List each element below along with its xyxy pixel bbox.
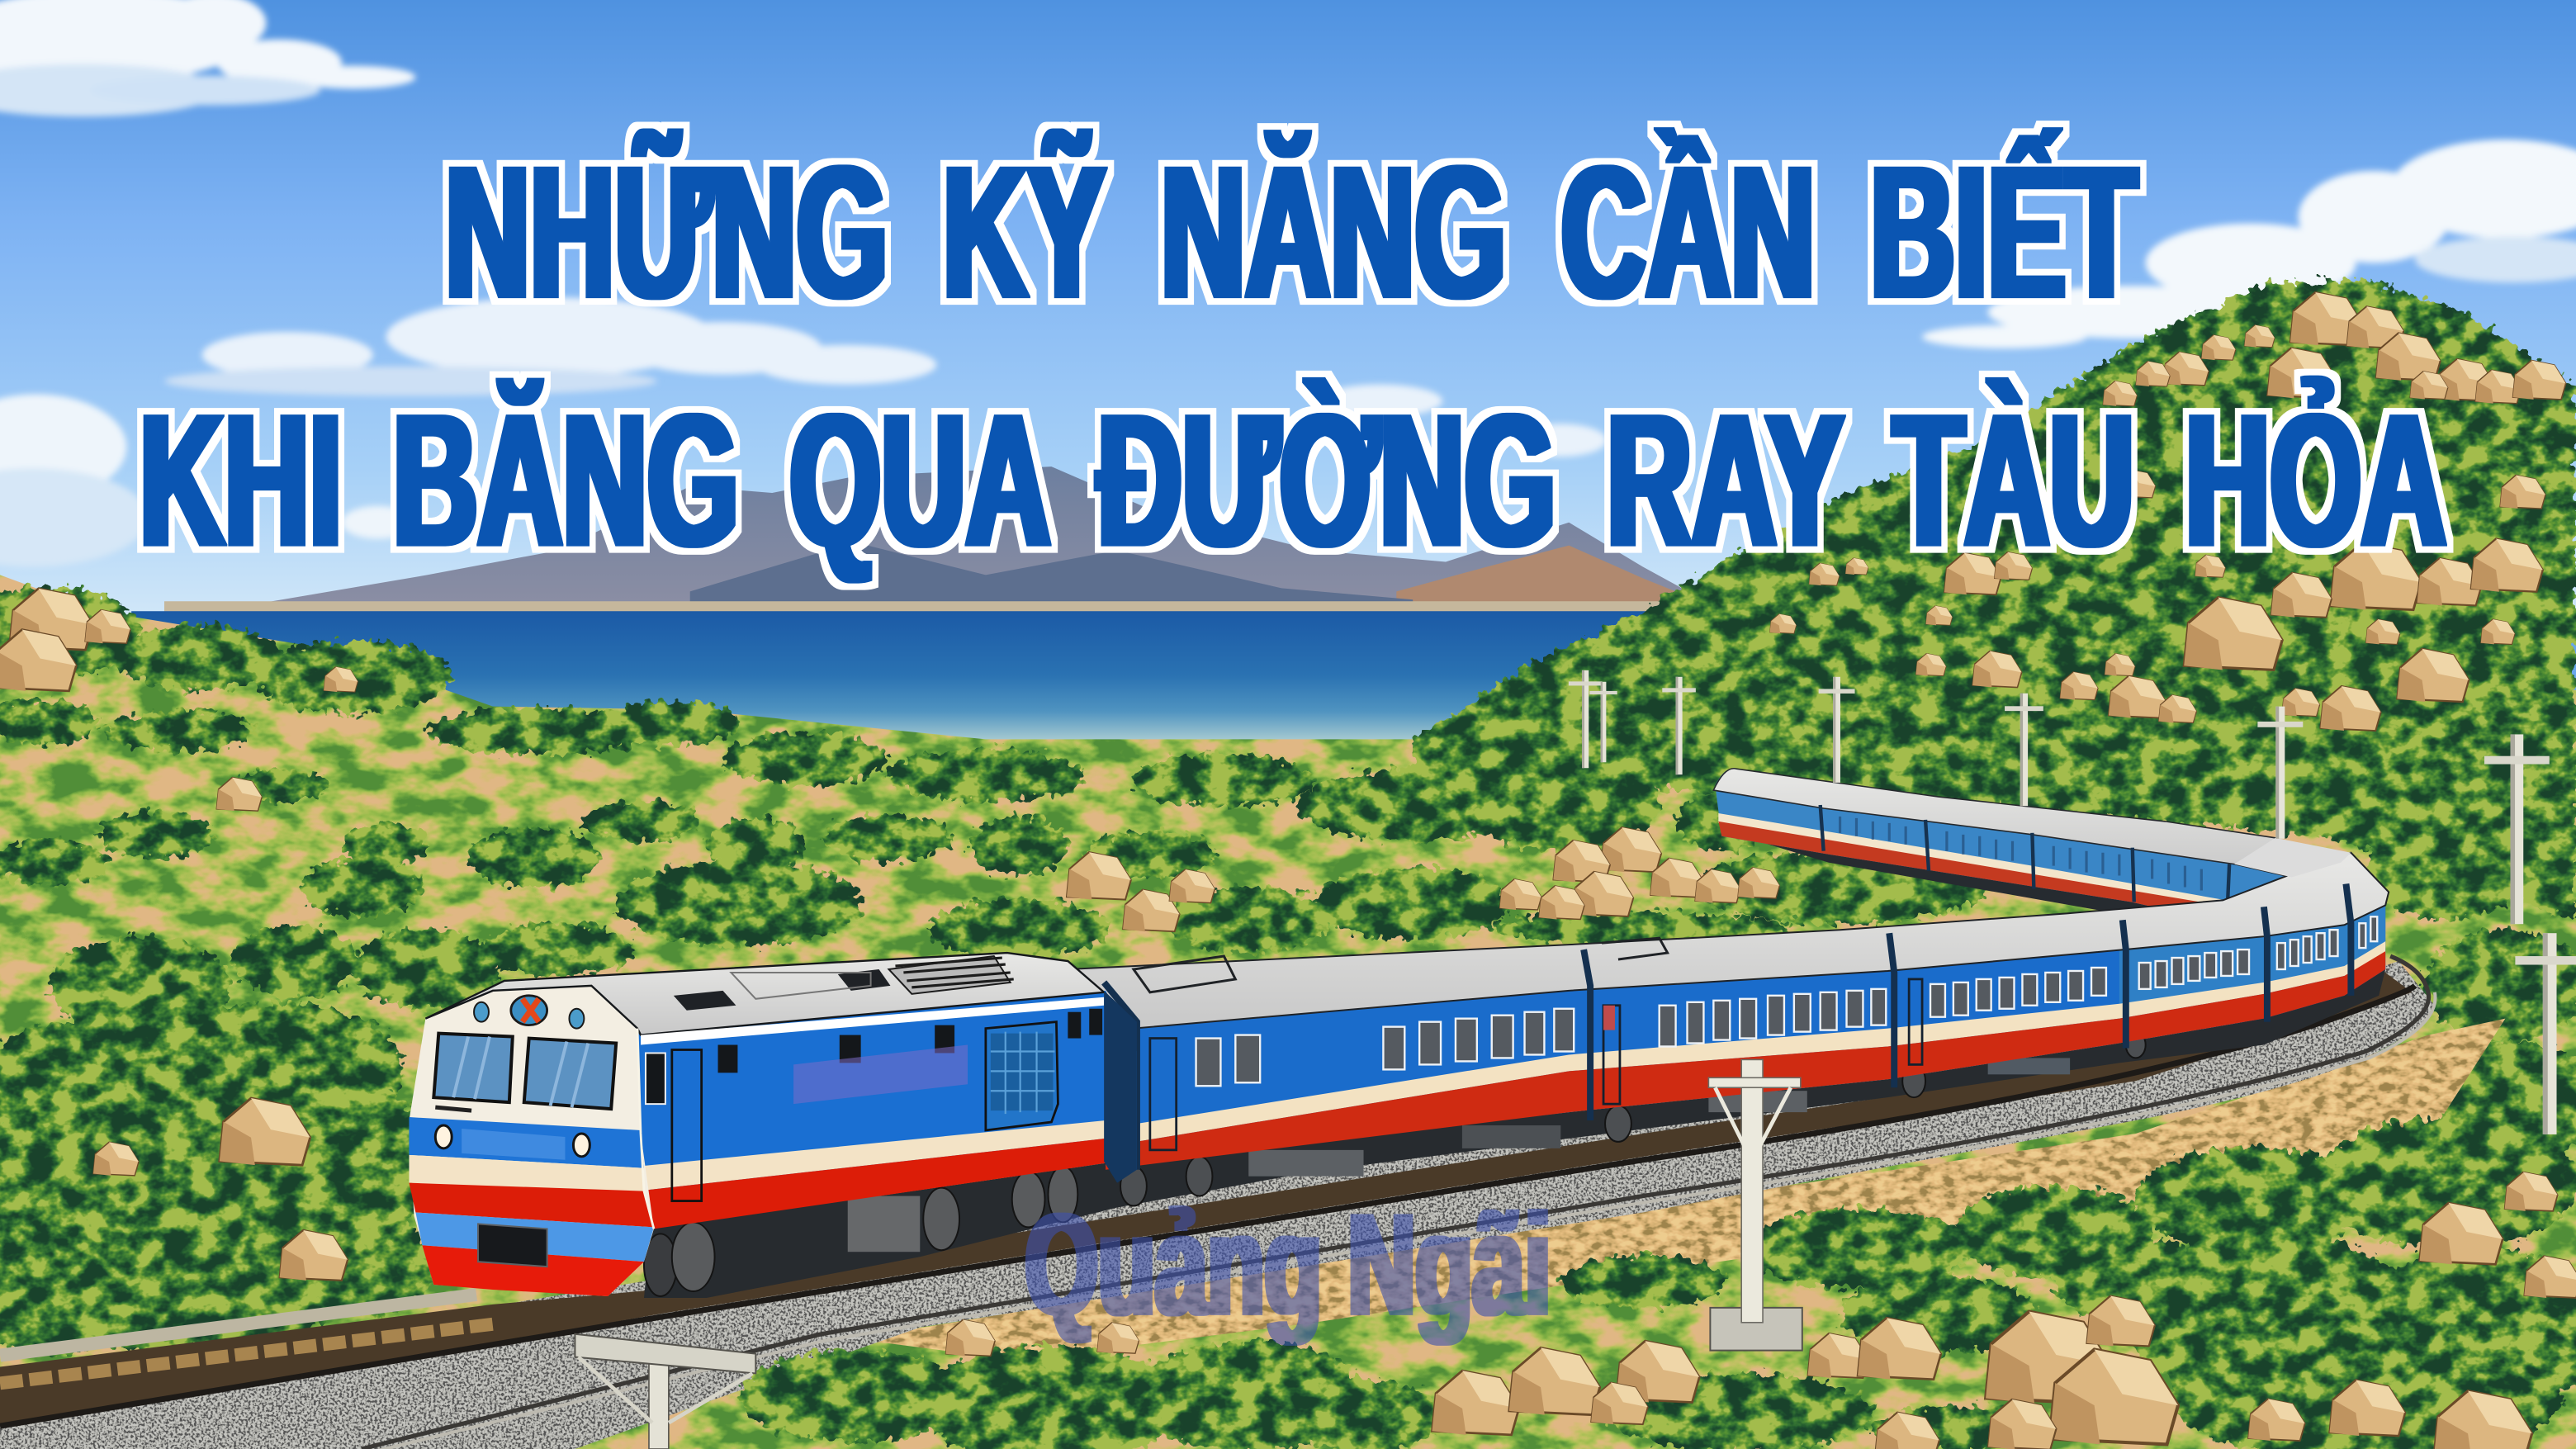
train undercarriage [644, 969, 2385, 1298]
cloud: top left [0, 0, 415, 116]
right hill foliage [1413, 279, 2576, 920]
cloud: centre [164, 297, 1607, 457]
carriage windows [1196, 916, 2377, 1086]
locomotive [409, 953, 1137, 1296]
locomotive door and windows [672, 1049, 702, 1201]
main train [409, 838, 2389, 1298]
cloud: left [0, 395, 414, 566]
sea [131, 611, 1692, 755]
left and middle bushes [0, 586, 2576, 1356]
far section of train [1713, 769, 2341, 926]
locomotive front [409, 981, 654, 1296]
sandy trackside embankment [855, 1019, 2505, 1361]
locomotive roof [425, 953, 1104, 1035]
carriage doors [1150, 979, 1922, 1150]
sky background [0, 0, 2576, 624]
ground field [0, 575, 2576, 1449]
foreground bushes [739, 1117, 2576, 1449]
railway ballast [0, 961, 2435, 1449]
concrete pole, centre [1708, 1059, 1802, 1351]
concrete pole, bottom left [575, 1334, 755, 1449]
locomotive side panel marking [793, 1045, 968, 1104]
locomotive headlights [435, 1125, 452, 1148]
locomotive grille [986, 1022, 1058, 1130]
distant mountains [164, 466, 1712, 614]
locomotive windshields [433, 1034, 513, 1102]
roof vents [1134, 938, 1668, 992]
roadside electric poles, background [1569, 670, 2576, 1134]
railway sleepers and rails [0, 956, 2436, 1449]
carriages body [1068, 838, 2389, 1170]
locomotive top lights [511, 996, 547, 1025]
watermark: Quảng Ngãi: Quảng Ngãi [1025, 1184, 1551, 1346]
clouds [0, 0, 2576, 566]
cloud: right [1922, 140, 2576, 348]
foreground boulders [946, 1172, 2576, 1449]
locomotive front plate [478, 1224, 547, 1267]
carriage joints [1104, 884, 2351, 1170]
locomotive side body [608, 991, 1137, 1296]
title [140, 127, 2446, 586]
boulders [0, 292, 2566, 1281]
